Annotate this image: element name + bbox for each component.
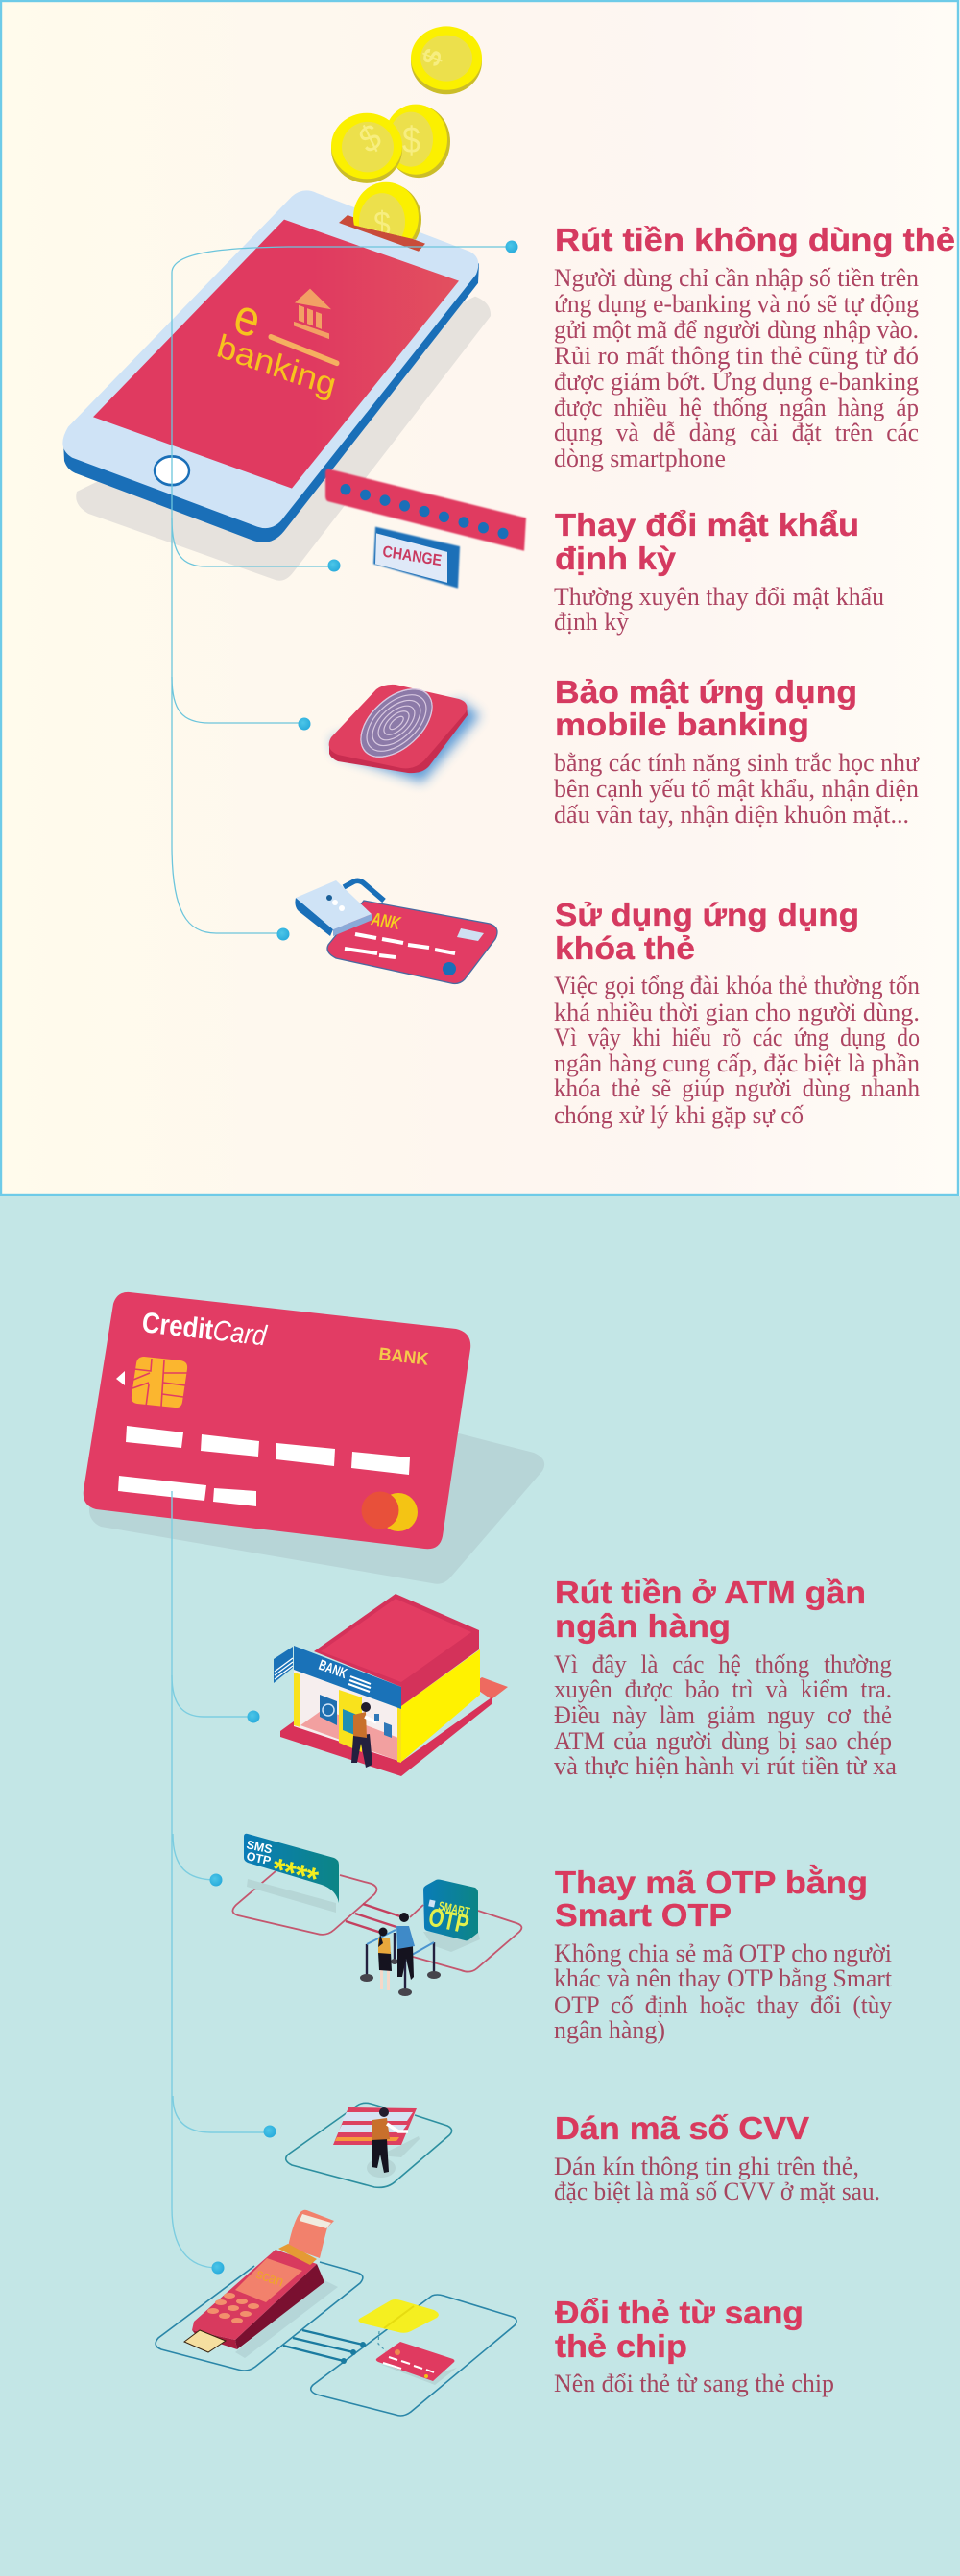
e-banking logo text: e [228, 287, 266, 349]
plate right [410, 1905, 521, 1972]
text block: Thay mã OTP bằng Smart OTP: Smart OTP [555, 1898, 732, 1934]
text block: Thay đổi mật khẩu định kỳ [554, 508, 884, 636]
connector lines: bottom panel [172, 1491, 270, 2268]
connector dots: bottom panel [209, 1711, 276, 2274]
coin middle left: $ [353, 115, 387, 161]
phone side [63, 263, 479, 542]
bubble shadow [247, 1879, 336, 1913]
text block: Đổi thẻ từ sang thẻ chip: Nên đổi thẻ từ sang thẻ chip [554, 2370, 834, 2397]
text block: Rút tiền không dùng thẻ: ứng dụng e-banking và nó sẽ tự động [554, 290, 919, 318]
man [396, 1913, 415, 1980]
queue posts and ropes [360, 1930, 441, 1996]
text block: Sử dụng ứng dụng khóa thẻ: khá nhiều thời gian cho người dùng. [554, 999, 920, 1026]
phone screen [93, 220, 459, 489]
text block: Sử dụng ứng dụng khóa thẻ: Sử dụng ứng dụng [555, 898, 859, 933]
card body [84, 1292, 470, 1549]
plate right [311, 2295, 516, 2416]
text block: Rút tiền ở ATM gần ngân hàng: Vì đây là các hệ thống thường [554, 1650, 892, 1678]
illustration: SMS OTP and Smart OTP: OTP [245, 1849, 272, 1867]
panel: bottom section background [0, 1196, 960, 2576]
home button [155, 456, 189, 485]
smart otp shadow [423, 1932, 480, 1952]
chip [132, 1357, 187, 1408]
illustration: SMS OTP and Smart OTP: SMART [437, 1898, 471, 1919]
text block: Thay đổi mật khẩu định kỳ: định kỳ [554, 608, 629, 636]
text block: Đổi thẻ từ sang thẻ chip: thẻ chip [555, 2329, 687, 2365]
text block: Rút tiền ở ATM gần ngân hàng: Rút tiền ở ATM gần [555, 1576, 866, 1611]
text block: Rút tiền ở ATM gần ngân hàng: ATM của người dùng bị sao chép [554, 1727, 892, 1755]
text block: Thay mã OTP bằng Smart OTP: ngân hàng) [554, 2016, 665, 2044]
man [372, 2107, 408, 2173]
e-banking logo text [213, 287, 340, 403]
text block: Thay đổi mật khẩu định kỳ: Thường xuyên thay đổi mật khẩu [554, 583, 884, 611]
phone shadow [76, 297, 491, 581]
text block: Thay mã OTP bằng Smart OTP [554, 1865, 893, 2044]
illustration: padlock on bank card [295, 880, 497, 983]
coin middle left [331, 113, 402, 183]
reader shadow [235, 2280, 338, 2358]
connector dots: top panel [276, 240, 518, 941]
text block: Rút tiền ở ATM gần ngân hàng: ngân hàng [555, 1609, 731, 1645]
coin entering slot [353, 182, 421, 240]
illustration: ATM bank building [274, 1594, 508, 1776]
illustration: CHANGE button [373, 527, 460, 589]
text block: Thay đổi mật khẩu định kỳ: Thay đổi mật khẩu [555, 508, 859, 543]
text block: Sử dụng ứng dụng khóa thẻ [554, 898, 920, 1129]
blue bank sign [294, 1646, 401, 1709]
text block: Dán mã số CVV [554, 2111, 880, 2205]
text block: Rút tiền không dùng thẻ: Người dùng chỉ cần nhập số tiền trên [554, 264, 919, 292]
text block: Thay mã OTP bằng Smart OTP: OTP cố định hoặc thay đổi (tùy [554, 1991, 892, 2019]
coin slot [339, 215, 425, 252]
phone face [62, 190, 478, 528]
tile [329, 705, 468, 773]
card [333, 2107, 417, 2145]
coin middle right [384, 105, 450, 178]
reader screen [235, 2258, 302, 2302]
text block: Rút tiền không dùng thẻ [554, 223, 955, 472]
card [327, 901, 497, 983]
text block: Bảo mật ứng dụng mobile banking: bên cạnh yếu tố mật khẩu, nhận diện [554, 775, 919, 803]
text block: Thay đổi mật khẩu định kỳ: định kỳ [555, 542, 676, 577]
text block: Thay mã OTP bằng Smart OTP: Không chia sẻ mã OTP cho người [554, 1939, 892, 1967]
text block: Rút tiền không dùng thẻ: được nhiều hệ thống ngân hàng áp [554, 394, 919, 421]
text block: Bảo mật ứng dụng mobile banking [554, 675, 920, 829]
illustration: CVV card and person [286, 2103, 452, 2187]
illustration: SMS OTP and Smart OTP: SMS [245, 1838, 274, 1857]
yellow wall [401, 1649, 480, 1762]
columns [294, 1673, 401, 1763]
card number bars [118, 1426, 410, 1506]
card brand: CreditCard [140, 1307, 269, 1353]
text block: Thay mã OTP bằng Smart OTP: khác và nên thay OTP bằng Smart [554, 1964, 893, 1992]
coin top [411, 26, 482, 94]
coin top: $ [417, 44, 447, 70]
connector lines: top panel [172, 247, 512, 933]
shadow [379, 2136, 420, 2157]
base [470, 1677, 508, 1699]
text block: Bảo mật ứng dụng mobile banking: bằng các tính năng sinh trắc học như [554, 749, 920, 777]
poster and ATM machine [320, 1695, 337, 1725]
blue glow [331, 701, 480, 782]
yellow chip [358, 2299, 439, 2333]
text block: Rút tiền không dùng thẻ: Rủi ro mất thông tin thẻ cũng từ đó [554, 342, 919, 370]
plate [286, 2103, 452, 2187]
roof [314, 1594, 479, 1706]
text block: Rút tiền ở ATM gần ngân hàng: và thực hiện hành vi rút tiền từ xa [554, 1752, 897, 1780]
Smart OTP box [423, 1880, 478, 1940]
dashed link [378, 2331, 386, 2351]
shackle [344, 880, 384, 901]
card bank name: BANK [378, 1343, 430, 1369]
text block: Đổi thẻ từ sang thẻ chip: Đổi thẻ từ sang [555, 2296, 804, 2331]
illustration: fingerprint tile [329, 676, 480, 782]
illustration: SMS OTP and Smart OTP [232, 1834, 521, 1996]
woman [378, 1928, 392, 1990]
person at ATM [351, 1702, 379, 1768]
illustration: CHANGE button: CHANGE [381, 543, 443, 570]
receipt paper [288, 2210, 334, 2258]
e-banking logo text: banking [213, 327, 340, 403]
plate left [232, 1871, 376, 1935]
coin middle right: $ [402, 119, 420, 160]
text block: Sử dụng ứng dụng khóa thẻ: khóa thẻ [555, 931, 695, 967]
illustration: phone with e-banking screen [62, 190, 491, 581]
illustration: credit card with shadow [84, 1292, 544, 1584]
text block: Rút tiền ở ATM gần ngân hàng: xuyên được bảo trì và kiểm tra. [554, 1675, 892, 1703]
fingerprint [348, 676, 444, 770]
illustration: SMS OTP and Smart OTP: **** [268, 1851, 323, 1896]
illustration: SMS OTP and Smart OTP: OTP [426, 1903, 471, 1939]
text block: Sử dụng ứng dụng khóa thẻ: ngân hàng cung cấp, đặc biệt là phần [554, 1049, 920, 1077]
text block: Rút tiền không dùng thẻ: Rút tiền không dùng thẻ [555, 223, 955, 258]
text block: Rút tiền không dùng thẻ: được giảm bớt. Ứng dụng e-banking [554, 368, 919, 396]
illustration: padlock on bank card: ANK [369, 909, 402, 934]
text block: Sử dụng ứng dụng khóa thẻ: Việc gọi tổng đài khóa thẻ thường tốn [554, 972, 920, 999]
text block: Dán mã số CVV: Dán kín thông tin ghi trên thẻ, [554, 2153, 859, 2180]
inserted card [184, 2330, 226, 2352]
glass front [294, 1670, 401, 1762]
side flag sign [274, 1647, 293, 1683]
illustration: password field [325, 469, 526, 551]
text block: Dán mã số CVV: Dán mã số CVV [555, 2111, 810, 2147]
reader body [235, 2264, 324, 2349]
connecting bars [283, 2330, 363, 2361]
text block: Sử dụng ứng dụng khóa thẻ: Vì vậy khi hiểu rõ các ứng dụng do [554, 1023, 920, 1051]
card network logo [361, 1492, 418, 1531]
connecting bars [346, 1904, 400, 1933]
text block: Thay mã OTP bằng Smart OTP: Thay mã OTP bằng [555, 1865, 868, 1901]
text block: Rút tiền ở ATM gần ngân hàng [554, 1576, 897, 1780]
reader keys [207, 2293, 259, 2323]
illustration: card reader, chip and card: scan [254, 2266, 286, 2291]
text block: Bảo mật ứng dụng mobile banking: Bảo mật ứng dụng [555, 675, 857, 710]
chip arrow [116, 1371, 125, 1385]
text block: Rút tiền ở ATM gần ngân hàng: Điều này làm giảm nguy cơ thẻ [554, 1701, 892, 1729]
text block: Dán mã số CVV: đặc biệt là mã số CVV ở mặt sau. [554, 2178, 880, 2205]
SMS bubble [244, 1834, 339, 1903]
lock body [333, 914, 372, 936]
text block: Rút tiền không dùng thẻ: gửi một mã để người dùng nhập vào. [554, 316, 919, 344]
illustration: ATM bank building: BANK [317, 1657, 349, 1682]
text block: Đổi thẻ từ sang thẻ chip [554, 2296, 834, 2397]
plate left [156, 2262, 363, 2371]
text block: Bảo mật ứng dụng mobile banking: mobile banking [555, 708, 809, 743]
text block: Rút tiền không dùng thẻ: dụng và dễ dàng cài đặt trên các [554, 419, 919, 446]
illustration: card reader, chip and card [156, 2210, 516, 2416]
small card [376, 2342, 457, 2385]
text block: Sử dụng ứng dụng khóa thẻ: khóa thẻ sẽ giúp người dùng nhanh [554, 1074, 920, 1102]
card shadow [89, 1433, 544, 1584]
coin entering slot: $ [373, 205, 391, 244]
illustration: gold coins [331, 26, 482, 255]
text block: Sử dụng ứng dụng khóa thẻ: chóng xử lý khi gặp sự cố [554, 1101, 804, 1129]
text block: Bảo mật ứng dụng mobile banking: dấu vân tay, nhận diện khuôn mặt... [554, 801, 909, 829]
text block: Rút tiền không dùng thẻ: dòng smartphone [554, 445, 726, 472]
bank icon [294, 289, 331, 339]
panel: top section background [0, 0, 960, 1196]
